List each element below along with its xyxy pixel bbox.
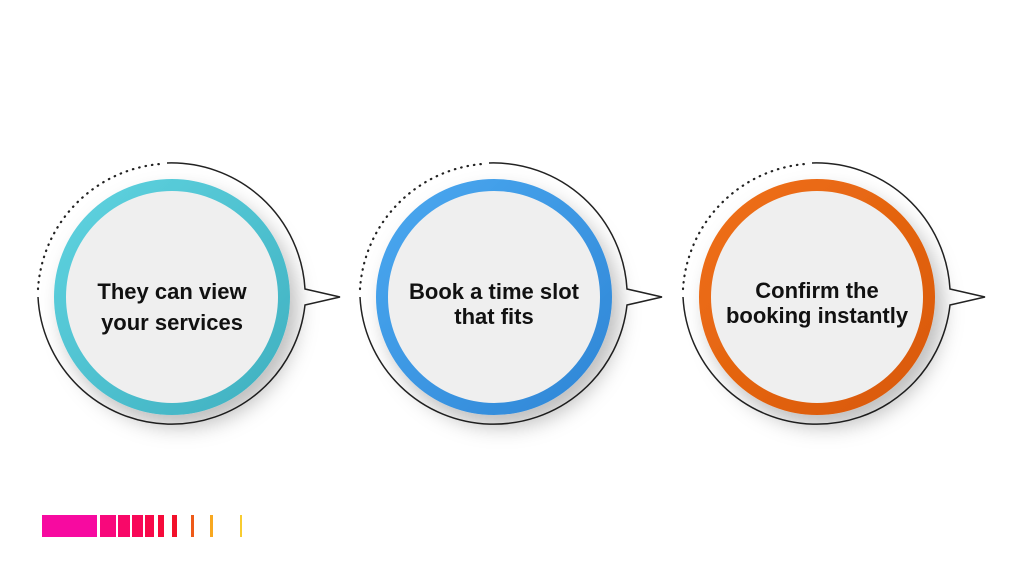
text: step 2: [409, 279, 580, 329]
panel: step 1: [38, 163, 340, 424]
text: step 2: Book a time slot: [409, 279, 580, 304]
decorative gradient bars: [42, 515, 242, 537]
text: step 2: that fits: [454, 304, 534, 329]
text: step 3: [726, 278, 909, 328]
panel: step 3: [683, 163, 985, 424]
text: step 3: booking instantly: [726, 303, 909, 328]
text: step 1: your services: [101, 310, 243, 335]
text: step 1: They can view: [97, 279, 247, 304]
panel: step 2: [360, 163, 662, 424]
text: step 1: [97, 279, 247, 335]
text: step 3: Confirm the: [755, 278, 879, 303]
